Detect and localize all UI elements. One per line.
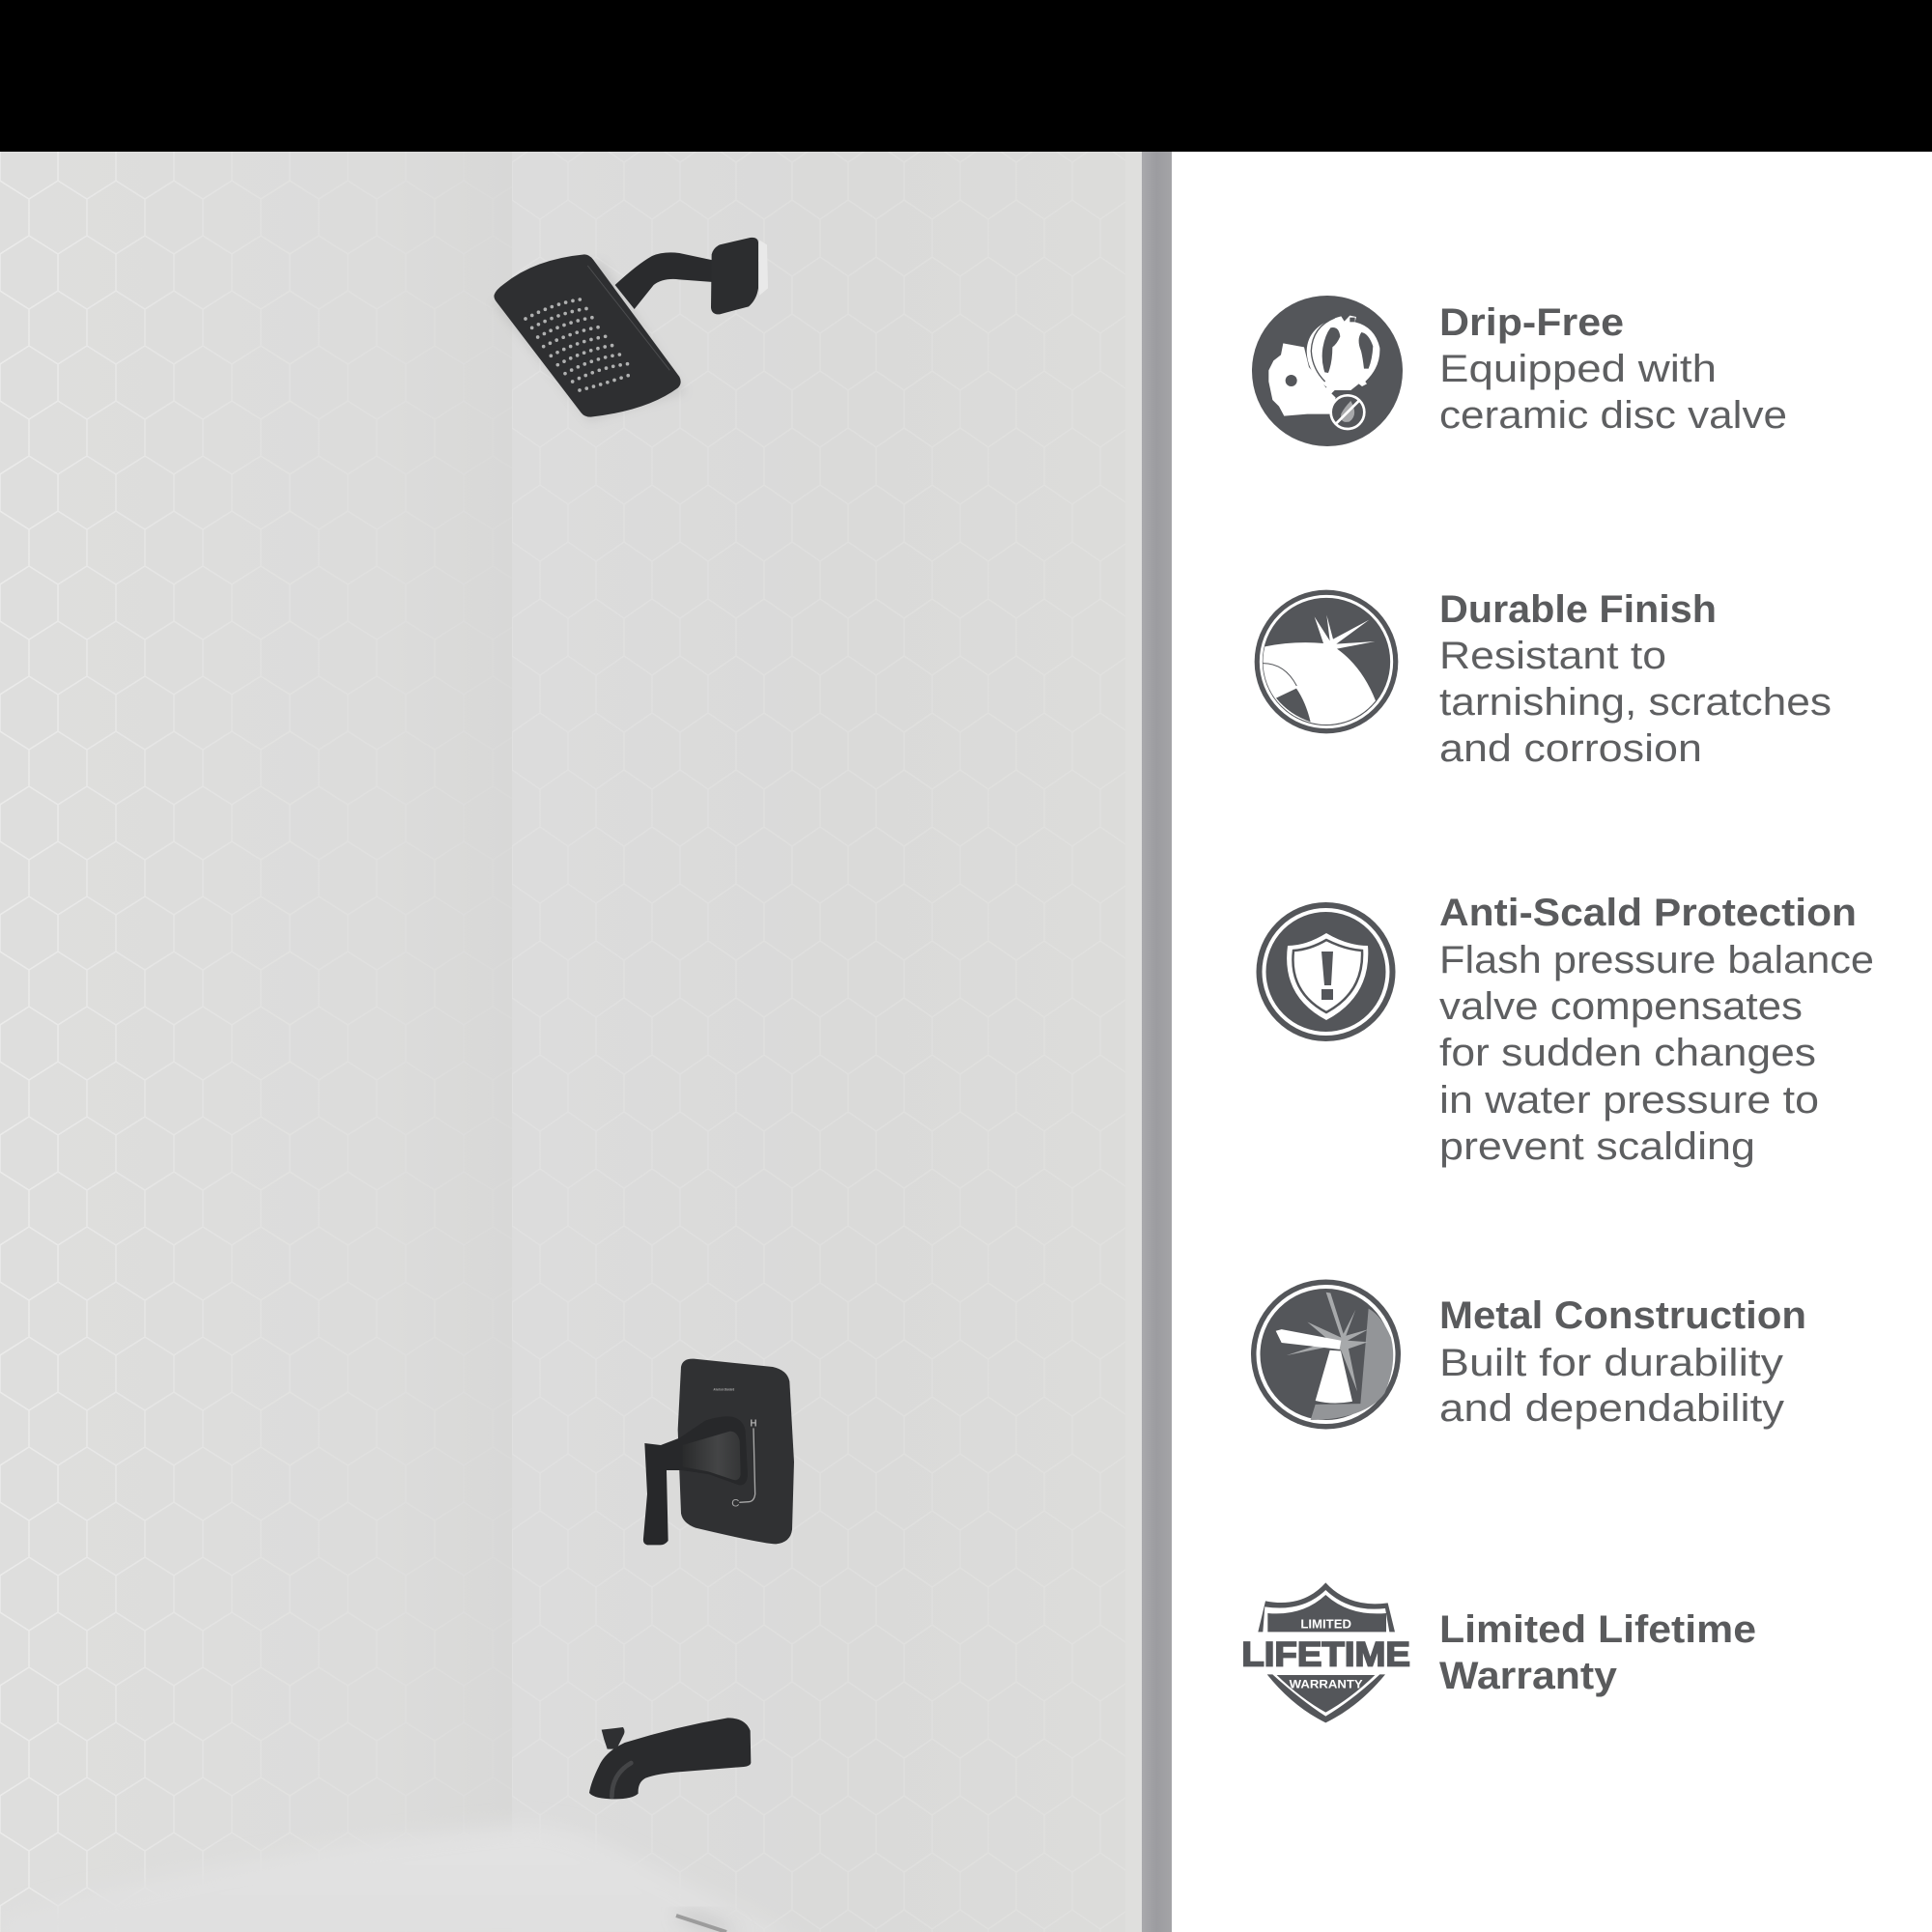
- feature text: durable finish: Durable Finish: [1439, 588, 1717, 631]
- icon: shiny durable finish: [1255, 590, 1398, 733]
- feature text: metal construction: Built for durability: [1439, 1342, 1783, 1384]
- feature: durable finish: [1255, 588, 1832, 770]
- icon: valve trim plate and lever handle: H: [750, 1419, 757, 1430]
- icon: valve trim plate and lever handle: C: [731, 1497, 739, 1509]
- feature text: drip-free: [1439, 301, 1787, 437]
- feature text: drip-free: Equipped with: [1439, 348, 1717, 390]
- feature text: anti-scald protection: Anti-Scald Protection: [1439, 892, 1857, 934]
- feature text: anti-scald protection: prevent scalding: [1439, 1125, 1755, 1168]
- icon: tub spout with diverter: [589, 1718, 751, 1799]
- icon: limited lifetime warranty shield: LIMITED: [1300, 1618, 1351, 1632]
- feature: drip-free: [1252, 296, 1787, 446]
- panel: features list: [1241, 296, 1874, 1722]
- icon: shower head and arm: [493, 238, 768, 422]
- icon: valve trim plate and lever handle: American Standard: [713, 1387, 734, 1391]
- right wall: [512, 152, 1142, 1932]
- feature text: durable finish: tarnishing, scratches: [1439, 681, 1832, 724]
- feature text: anti-scald protection: valve compensates: [1439, 985, 1803, 1028]
- feature: anti-scald protection: [1256, 892, 1874, 1168]
- feature text: anti-scald protection: for sudden changes: [1439, 1032, 1816, 1074]
- feature text: limited lifetime warranty: [1439, 1608, 1756, 1697]
- icon: ceramic disc valve: [1252, 296, 1403, 446]
- feature text: anti-scald protection: [1439, 892, 1874, 1168]
- icon: limited lifetime warranty shield: LIFETIME: [1241, 1636, 1410, 1674]
- feature text: metal construction: and dependability: [1439, 1387, 1784, 1430]
- icon: warning shield: [1256, 902, 1395, 1041]
- feature text: drip-free: Drip-Free: [1439, 301, 1624, 344]
- feature text: anti-scald protection: Flash pressure balance: [1439, 939, 1874, 981]
- feature text: drip-free: ceramic disc valve: [1439, 394, 1787, 437]
- feature text: durable finish: and corrosion: [1439, 727, 1702, 770]
- feature text: metal construction: Metal Construction: [1439, 1294, 1806, 1337]
- feature text: durable finish: [1439, 588, 1832, 770]
- icon: limited lifetime warranty shield: WARRANTY: [1290, 1677, 1363, 1690]
- top black band: [0, 0, 1932, 152]
- feature text: metal construction: [1439, 1294, 1806, 1430]
- bathtub rim: [0, 1824, 802, 1932]
- panel: product photo of shower wall: [0, 152, 1172, 1932]
- feature: limited lifetime warranty: [1241, 1582, 1756, 1722]
- feature text: limited lifetime warranty: Warranty: [1439, 1655, 1618, 1697]
- icon: valve trim plate and lever handle: [643, 1359, 794, 1545]
- feature text: durable finish: Resistant to: [1439, 635, 1666, 677]
- wall edge band: [1142, 152, 1172, 1932]
- feature text: anti-scald protection: in water pressure to: [1439, 1079, 1819, 1122]
- feature: metal construction: [1251, 1279, 1806, 1430]
- icon: limited lifetime warranty shield: [1241, 1582, 1410, 1722]
- left wall: [0, 152, 512, 1932]
- icon: metal faucet handle: [1251, 1279, 1401, 1430]
- feature text: limited lifetime warranty: Limited Lifetime: [1439, 1608, 1756, 1651]
